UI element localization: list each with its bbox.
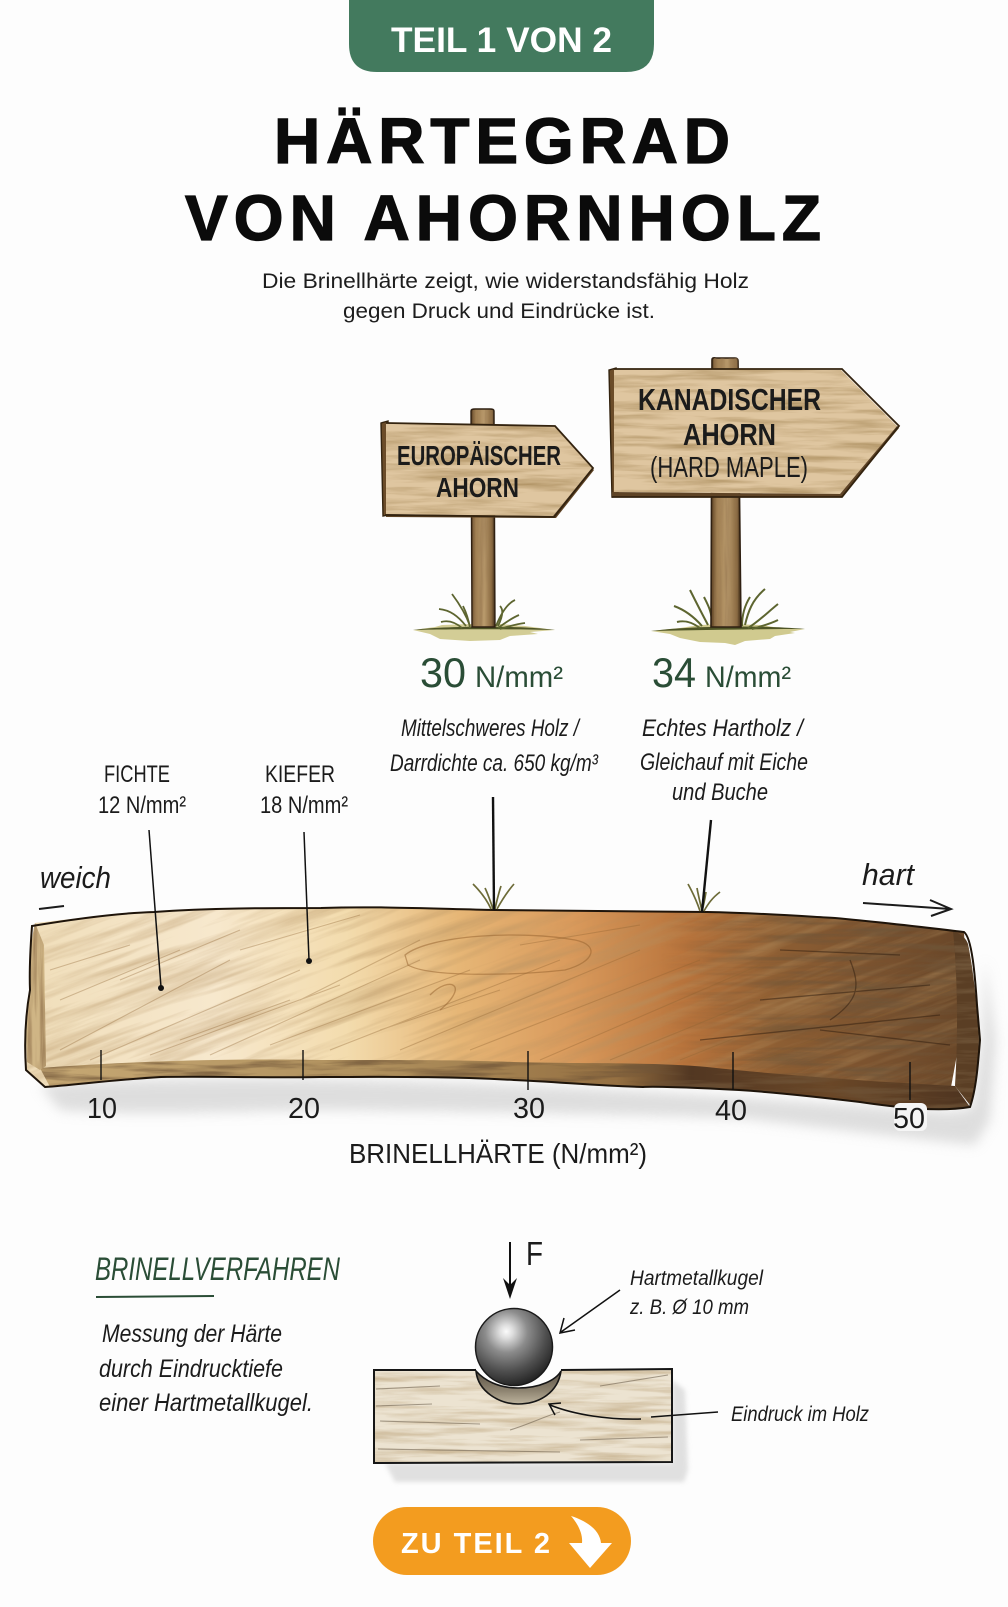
ball label bbox=[629, 1267, 764, 1319]
Brinell method heading: BRINELLVERFAHREN bbox=[95, 1251, 341, 1287]
dent label: Eindruck im Holz bbox=[731, 1403, 869, 1426]
label: Kiefer: KIEFER bbox=[265, 761, 335, 788]
label: Fichte: FICHTE bbox=[104, 761, 170, 788]
arrow to ball bbox=[560, 1290, 620, 1333]
pointer: Kiefer bbox=[304, 832, 312, 964]
post bbox=[471, 409, 495, 627]
scale numbers: 20 bbox=[288, 1093, 320, 1125]
plank outline bbox=[25, 907, 980, 1109]
force label: F bbox=[526, 1235, 543, 1272]
label: weich bbox=[39, 860, 111, 909]
pointer: 30 with tuft bbox=[473, 797, 514, 910]
button: zu Teil 2 bbox=[373, 1507, 631, 1575]
force arrow bbox=[503, 1242, 517, 1299]
note: European maple: Darrdichte ca. 650 kg/m³ bbox=[390, 750, 599, 777]
dent bbox=[476, 1371, 561, 1404]
scale numbers: 40 bbox=[715, 1095, 747, 1127]
note: European maple: Mittelschweres Holz / bbox=[401, 715, 581, 742]
value: 34 N/mm2 bbox=[652, 649, 791, 696]
sign board bbox=[609, 366, 902, 498]
grass tuft left bbox=[413, 594, 555, 641]
Brinell method description: einer Hartmetallkugel. bbox=[99, 1389, 313, 1417]
sign text: KANADISCHER bbox=[638, 382, 821, 417]
plank left end bbox=[26, 923, 46, 1070]
sign board bbox=[380, 420, 600, 520]
badge: Teil 1 von 2: TEIL 1 VON 2 bbox=[391, 21, 612, 60]
Brinell method description: durch Eindrucktiefe bbox=[99, 1355, 283, 1383]
value: 34 N/mm2: 34 bbox=[652, 649, 696, 696]
note: European maple bbox=[390, 715, 599, 777]
note: Canadian maple: Echtes Hartholz / bbox=[642, 715, 805, 742]
value: 34 N/mm2: N/mm² bbox=[705, 661, 791, 694]
value: 30 N/mm2 bbox=[420, 649, 563, 696]
label: Kiefer: 18 N/mm² bbox=[260, 792, 348, 819]
Brinell method description bbox=[99, 1320, 313, 1417]
post bbox=[711, 358, 741, 627]
scale numbers: 10 bbox=[87, 1093, 117, 1125]
plank top face bbox=[26, 908, 964, 1086]
label: hart bbox=[862, 857, 951, 916]
value: 30 N/mm2: 30 bbox=[420, 649, 466, 696]
badge: Teil 1 von 2 bbox=[349, 0, 654, 72]
label: weich: weich bbox=[40, 860, 111, 895]
value: 30 N/mm2: N/mm² bbox=[475, 661, 563, 694]
Brinell diagram bbox=[370, 1235, 869, 1482]
pointer: 34 with tuft bbox=[688, 820, 720, 912]
steel ball bbox=[476, 1308, 552, 1386]
wooden plank scale bbox=[24, 906, 1000, 1148]
plank shadow bbox=[40, 960, 996, 1145]
sign text: AHORN bbox=[683, 417, 776, 452]
plank front edge bbox=[40, 1060, 970, 1108]
note: Canadian maple bbox=[640, 715, 808, 806]
block shadow bbox=[385, 1380, 688, 1482]
button: zu Teil 2: ZU TEIL 2 bbox=[401, 1528, 550, 1560]
plank right end bbox=[953, 932, 979, 1105]
scale ticks bbox=[101, 1050, 910, 1100]
label: Fichte: 12 N/mm² bbox=[98, 792, 186, 819]
pointer: Fichte bbox=[149, 830, 164, 991]
ball label: z. B. Ø 10 mm bbox=[629, 1296, 749, 1319]
sign text: (HARD MAPLE) bbox=[650, 452, 808, 484]
icon: curved arrow bbox=[569, 1516, 612, 1568]
subtitle: Die Brinellhärte zeigt, wie widerstandsfähig Holz bbox=[262, 270, 749, 293]
label: Fichte bbox=[98, 761, 186, 819]
scale numbers: 50 bbox=[893, 1103, 925, 1135]
grass tuft right bbox=[651, 589, 805, 645]
note: Canadian maple: Gleichauf mit Eiche bbox=[640, 749, 808, 776]
subtitle: gegen Druck und Eindrücke ist. bbox=[343, 300, 655, 323]
ball label: Hartmetallkugel bbox=[630, 1267, 764, 1290]
title: VON AHORNHOLZ bbox=[185, 182, 821, 254]
arrow to dent bbox=[549, 1403, 718, 1419]
sign text bbox=[397, 440, 561, 503]
wood block bbox=[370, 1365, 676, 1467]
scale numbers: 30 bbox=[513, 1093, 545, 1125]
axis title: BRINELLHÄRTE (N/mm²) bbox=[349, 1138, 647, 1169]
scale numbers bbox=[87, 1093, 925, 1135]
title bbox=[185, 105, 821, 254]
sign text: AHORN bbox=[436, 472, 519, 503]
label: hart: hart bbox=[862, 857, 915, 892]
subtitle bbox=[262, 270, 749, 323]
note: Canadian maple: und Buche bbox=[672, 779, 768, 806]
label halo behind 50 bbox=[894, 1103, 927, 1131]
Brinell method description: Messung der Härte bbox=[102, 1320, 282, 1348]
signpost: Europäischer Ahorn bbox=[380, 409, 600, 641]
title: HÄRTEGRAD bbox=[274, 105, 730, 177]
sign text bbox=[638, 382, 821, 484]
label: Kiefer bbox=[260, 761, 348, 819]
sign text: EUROPÄISCHER bbox=[397, 440, 561, 471]
signpost: Kanadischer Ahorn bbox=[609, 358, 902, 645]
